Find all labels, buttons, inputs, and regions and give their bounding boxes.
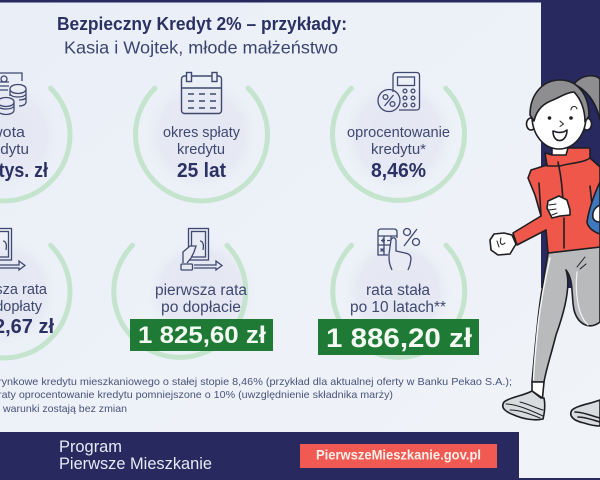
panel: repayment period	[136, 72, 268, 201]
footnotes	[0, 376, 512, 415]
subtitle: Kasia i Wojtek, młode małżeństwo	[64, 38, 338, 58]
sock	[532, 382, 544, 398]
icon: banknote with arrow	[0, 228, 25, 270]
ponytail	[574, 76, 600, 120]
value badge: fixed instalment after 10 years	[318, 319, 479, 355]
panel: interest rate: kredytu*	[371, 142, 426, 158]
front fist	[547, 196, 570, 218]
hair	[530, 80, 589, 122]
footnotes: warunki zostają bez zmian	[2, 403, 127, 415]
panel: first instalment before subsidy	[0, 228, 70, 358]
ears	[526, 118, 536, 130]
panel: repayment period: kredytu	[177, 142, 225, 158]
panel: fixed instalment after 10 years: po 10 latach**	[350, 299, 446, 316]
footnotes: rynkowe kredytu mieszkaniowego o stałej stopie 8,46% (przykład dla aktualnej oferty w Banku Pekao S.A.);	[0, 376, 512, 388]
trousers	[532, 247, 600, 382]
icon: calculator, hand and percent	[378, 228, 420, 270]
right hand on strap	[593, 205, 600, 222]
panel: interest rate	[333, 72, 464, 200]
icon: banknote and coins	[0, 73, 26, 114]
title: Bezpieczny Kredyt 2% – przykłady:	[57, 14, 347, 34]
label: repayment period: okres spłaty	[163, 125, 241, 141]
mouth	[553, 130, 567, 141]
panel: fixed instalment after 10 years	[318, 228, 479, 357]
value: interest rate: 8,46%	[371, 160, 426, 182]
back fist	[490, 233, 516, 255]
eyes, nose and brow	[548, 116, 551, 120]
value badge: first instalment after subsidy: 1 825,60 zł	[138, 322, 266, 349]
value badge: fixed instalment after 10 years: 1 886,20 zł	[326, 323, 473, 353]
website button: PierwszeMieszkanie.gov.pl	[316, 446, 481, 462]
value: repayment period: 25 lat	[177, 160, 226, 182]
icon: hand, banknote and arrow	[181, 228, 222, 270]
illustration: running woman	[490, 76, 600, 426]
panel: first instalment after subsidy: po dopłacie	[161, 299, 241, 316]
front shoe	[503, 391, 545, 420]
program name: Program	[59, 438, 122, 456]
jacket	[513, 148, 600, 253]
icon: calculator with percent	[378, 72, 420, 112]
neck	[552, 142, 568, 158]
label: first instalment after subsidy: pierwsza rata	[155, 282, 247, 299]
bag strap	[587, 182, 600, 234]
footnotes: raty oprocentowanie kredytu pomniejszone o 10% (uwzględnienie składnika marży)	[0, 389, 393, 401]
label: interest rate: oprocentowanie	[347, 125, 450, 141]
navy side panel	[541, 0, 600, 288]
label: fixed instalment after 10 years: rata stała	[366, 282, 430, 299]
second shoe	[571, 400, 600, 426]
panel: loan amount	[0, 73, 70, 201]
program name: Pierwsze Mieszkanie	[59, 455, 212, 473]
icon: calendar	[182, 72, 222, 114]
face	[532, 84, 586, 149]
website button	[300, 444, 497, 468]
footer band	[0, 432, 600, 480]
panel: first instalment after subsidy	[114, 228, 273, 357]
program name	[59, 438, 212, 473]
